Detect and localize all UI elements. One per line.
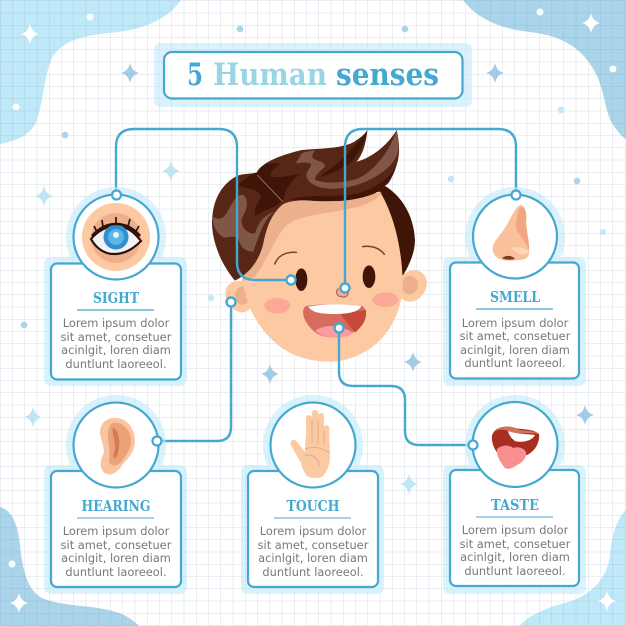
heading: SIGHT <box>93 290 139 307</box>
left ear <box>225 281 253 312</box>
body text: sit amet, consetuer <box>61 538 172 552</box>
body text: acinlgit, loren diam <box>61 551 171 565</box>
body text: acinlgit, loren diam <box>460 343 570 357</box>
body text: duntlunt laoreeol. <box>464 356 566 370</box>
connector: hearing <box>157 302 231 441</box>
right ear <box>398 270 427 302</box>
body text: acinlgit, loren diam <box>258 551 368 565</box>
forehead shadow <box>242 193 382 282</box>
body text: acinlgit, loren diam <box>61 343 171 357</box>
icon: eye <box>82 203 150 271</box>
body text: Lorem ipsum dolor <box>63 524 170 538</box>
body text: duntlunt laoreeol. <box>65 357 167 371</box>
body text: Lorem ipsum dolor <box>260 524 367 538</box>
body text: acinlgit, loren diam <box>460 550 570 564</box>
title <box>154 43 472 107</box>
body text: Lorem ipsum dolor <box>63 316 170 330</box>
body text: sit amet, consetuer <box>61 330 172 344</box>
panel: sight <box>44 187 187 386</box>
title: senses <box>336 57 439 93</box>
body text: duntlunt laoreeol. <box>65 565 167 579</box>
body text: duntlunt laoreeol. <box>464 564 566 578</box>
connector: sight <box>116 129 291 280</box>
heading: SMELL <box>490 289 540 306</box>
mouth <box>303 304 366 338</box>
body text: Lorem ipsum dolor <box>462 316 569 330</box>
connector nodes <box>226 276 350 332</box>
heading: TOUCH <box>286 498 340 515</box>
icon: ear <box>100 418 135 475</box>
icon: nose <box>493 205 529 261</box>
title: 5 <box>187 57 203 93</box>
body text: Lorem ipsum dolor <box>462 523 569 537</box>
icon: mouth <box>492 426 539 469</box>
nose <box>337 288 348 297</box>
connector: smell <box>345 129 516 288</box>
panel: hearing <box>44 395 187 594</box>
face <box>243 192 403 362</box>
title: Human <box>213 57 327 93</box>
hair <box>212 130 399 281</box>
right hair back <box>377 182 415 276</box>
heading: TASTE <box>491 497 539 514</box>
body text: sit amet, consetuer <box>460 537 571 551</box>
eyebrows <box>275 246 384 264</box>
character head <box>212 130 427 362</box>
icon: hand <box>290 413 330 478</box>
panel: touch <box>241 395 384 594</box>
panel: smell <box>443 187 586 386</box>
eyes <box>295 265 375 291</box>
body text: duntlunt laoreeol. <box>262 565 364 579</box>
body text: sit amet, consetuer <box>460 329 571 343</box>
panel: taste <box>443 395 586 594</box>
body text: sit amet, consetuer <box>258 538 369 552</box>
connector: taste <box>339 328 473 445</box>
cheeks <box>264 292 398 313</box>
heading: HEARING <box>82 498 150 515</box>
